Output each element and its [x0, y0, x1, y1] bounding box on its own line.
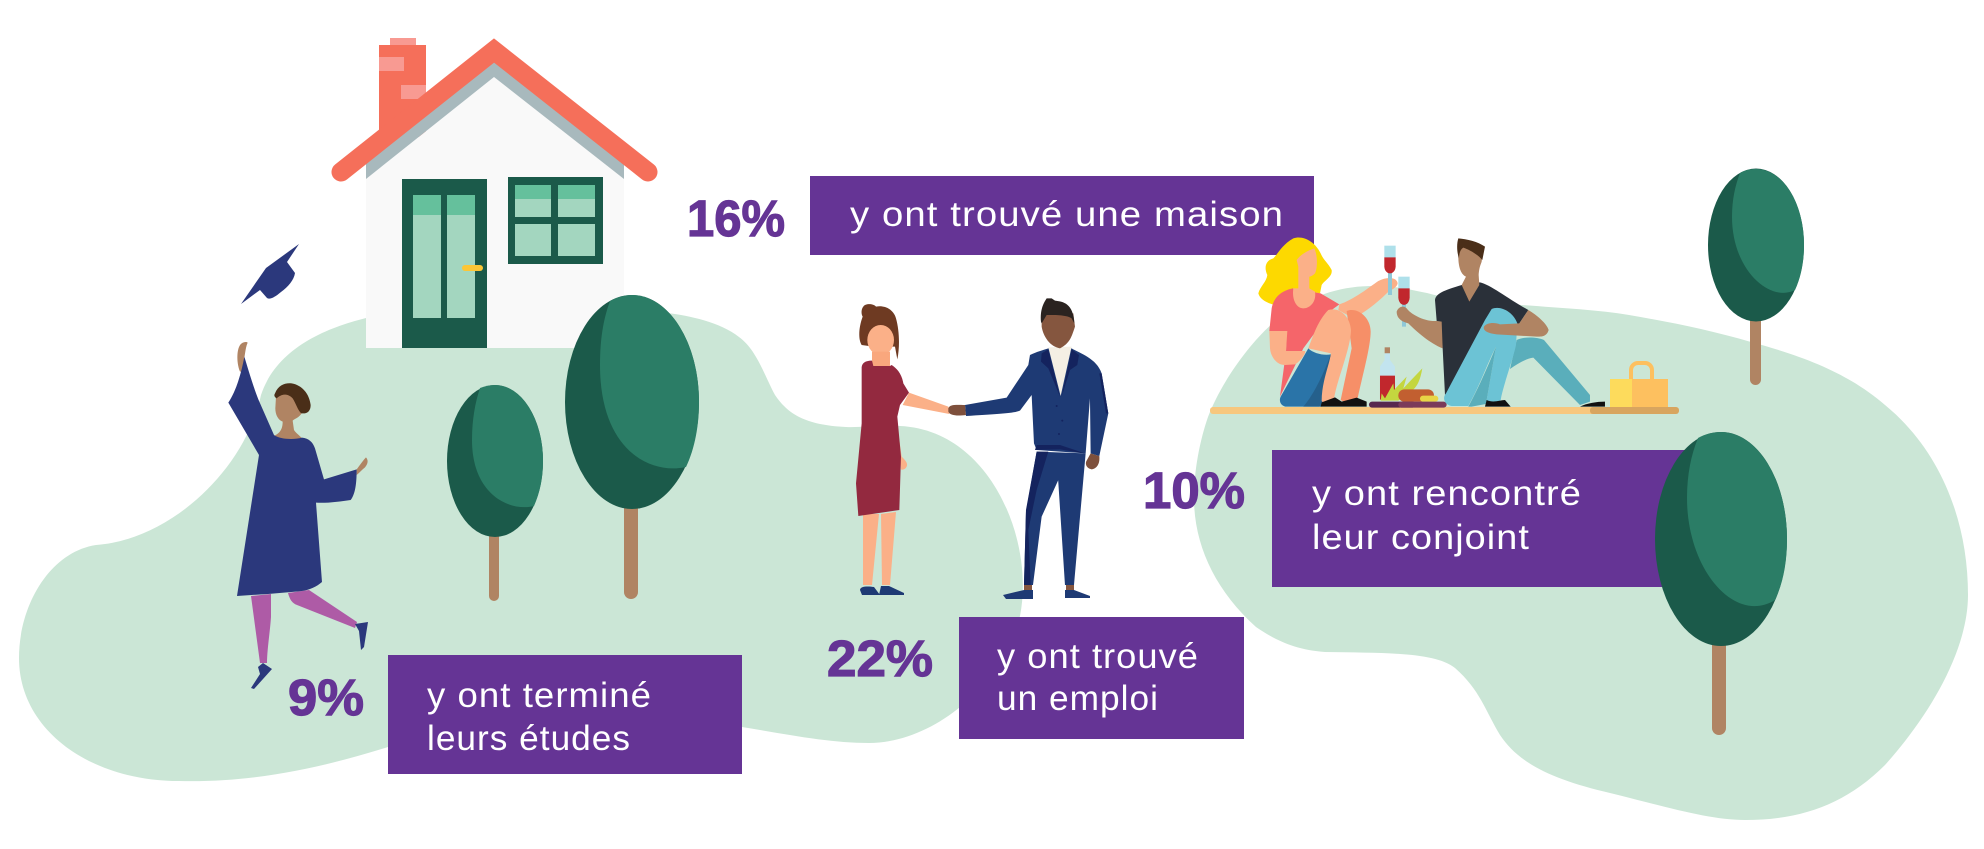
woman's neck	[872, 352, 890, 367]
man's shirt	[1048, 347, 1072, 396]
panel: 16% label	[687, 176, 1314, 255]
handshake hand	[948, 405, 966, 416]
hair	[274, 383, 311, 413]
icon: house	[341, 38, 648, 348]
figure: handshake couple	[856, 298, 1108, 599]
cheese	[1420, 396, 1438, 402]
man's lapels	[1041, 349, 1079, 397]
gown	[228, 357, 357, 596]
house wall	[366, 77, 624, 348]
percentage: 9%	[288, 669, 364, 726]
woman's shirt	[1269, 288, 1339, 397]
icon: picnic basket	[1610, 363, 1668, 407]
woman's hair	[859, 304, 899, 359]
icon: top right tree	[1708, 168, 1804, 385]
man's hair	[1457, 238, 1485, 260]
icon: graduation cap	[241, 244, 299, 304]
chimney	[379, 38, 426, 137]
label text line 1: y ont terminé	[427, 676, 652, 715]
raised hand	[237, 342, 248, 372]
woman's raised arm	[1338, 278, 1398, 318]
figure: picnic couple	[1210, 237, 1679, 414]
legs	[251, 590, 357, 663]
wine glass two	[1398, 277, 1410, 327]
woman's lower hand	[897, 422, 907, 470]
percentage: 22%	[827, 630, 933, 687]
shoes	[251, 622, 368, 689]
label text: y ont trouvé une maison	[850, 195, 1284, 234]
woman's far leg	[1341, 310, 1371, 402]
green blob: left and centre ground	[19, 305, 1023, 781]
man's shirt	[1435, 282, 1528, 395]
label text line 2: leur conjoint	[1312, 518, 1530, 557]
door	[402, 179, 487, 348]
man's head and neck	[1458, 245, 1483, 302]
icon: lower right tree	[1655, 432, 1787, 735]
woman's face	[867, 325, 894, 355]
upper body	[228, 342, 368, 596]
other hand	[357, 457, 368, 475]
panel: 9% label	[288, 655, 742, 774]
label text line 2: leurs études	[427, 719, 631, 758]
man's buttons	[1056, 405, 1063, 435]
man's jacket	[965, 348, 1108, 456]
label text line 1: y ont rencontré	[1312, 474, 1582, 513]
leg shading	[1468, 347, 1496, 407]
plate front	[1398, 402, 1447, 408]
man's right arm	[1484, 310, 1549, 337]
roof	[341, 50, 648, 172]
woman's lower arm	[1269, 331, 1305, 365]
woman legs and shoes	[860, 512, 904, 595]
percentage: 10%	[1143, 462, 1245, 519]
wine glass one	[1384, 246, 1396, 295]
roof underside	[366, 60, 624, 179]
man's near leg	[1444, 308, 1517, 406]
woman's hair	[1258, 237, 1332, 305]
shorts shading	[1303, 353, 1331, 407]
panel: 22% label	[827, 617, 1244, 739]
woman's dress	[856, 361, 909, 516]
label text line 1: y ont trouvé	[997, 637, 1199, 676]
man's shoes	[1485, 400, 1605, 407]
head and neck	[274, 393, 302, 440]
man's far leg	[1510, 337, 1590, 405]
percentage: 16%	[687, 190, 785, 247]
plate	[1369, 402, 1416, 408]
man's hair	[1041, 298, 1074, 323]
upper bodies	[856, 298, 1108, 585]
wine bottle	[1380, 347, 1395, 400]
woman's face and neck	[1293, 248, 1317, 308]
icon: large tree centre-left	[565, 295, 699, 599]
woman's shorts	[1280, 348, 1331, 407]
woman with food	[1258, 237, 1447, 408]
panel: 10% label	[1143, 450, 1687, 587]
figure: graduate	[228, 244, 368, 689]
man's lower hand	[1086, 453, 1099, 469]
man's trousers	[1024, 452, 1086, 585]
window	[508, 177, 603, 264]
woman's shoes	[1321, 397, 1367, 407]
icon: small tree left	[447, 385, 543, 601]
man's jacket shading	[1035, 373, 1108, 453]
leaves	[1381, 368, 1422, 401]
man's left arm	[1397, 307, 1443, 348]
woman's near leg	[1308, 309, 1351, 404]
woman's arm	[903, 393, 949, 414]
man's head	[1042, 313, 1075, 348]
man legs and shoes	[1003, 584, 1090, 599]
man	[1397, 238, 1605, 407]
label text line 2: un emploi	[997, 679, 1159, 718]
man's trouser shadow	[1024, 452, 1048, 585]
food	[1398, 389, 1434, 402]
green blob: right ground	[1194, 286, 1968, 820]
picnic ground	[1210, 407, 1679, 414]
